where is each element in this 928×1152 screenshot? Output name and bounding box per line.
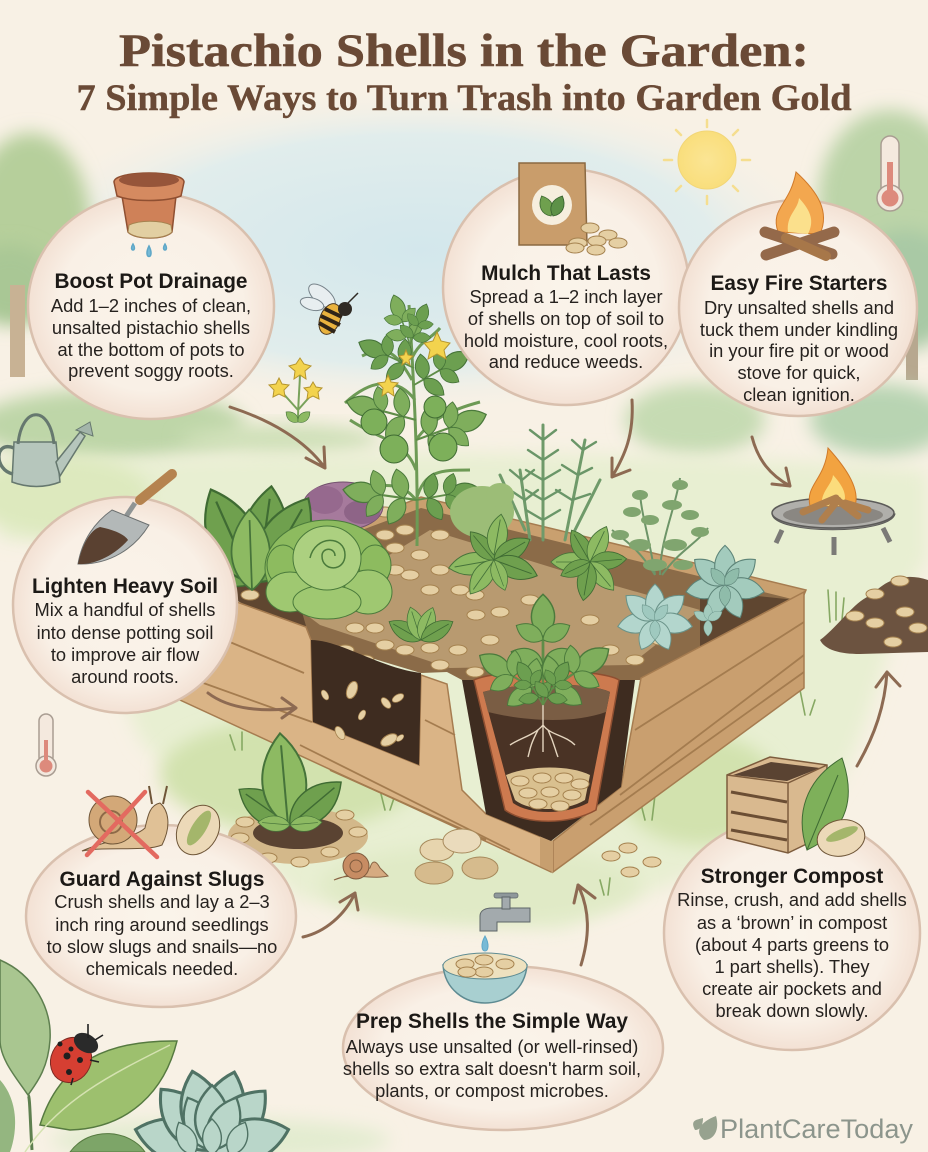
bubble: boost pot drainage: Boost Pot Drainage bbox=[55, 270, 247, 293]
bubble: mulch that lasts: Mulch That Lasts bbox=[481, 262, 651, 285]
plant: purple lettuce bbox=[303, 482, 383, 530]
bubble: boost pot drainage: unsalted pistachio shells bbox=[52, 317, 250, 338]
bubble: easy fire starters: Dry unsalted shells and bbox=[704, 297, 894, 318]
plant: carrot top in pot bbox=[463, 594, 628, 722]
arrow: to bed from drainage bbox=[230, 407, 325, 468]
panel: pot cutaway with soil bbox=[462, 671, 635, 841]
plant: spinach bbox=[184, 480, 328, 597]
icon: thermometer top right bbox=[877, 136, 903, 211]
bed back rim bbox=[232, 497, 806, 604]
icon: pistachio bbox=[168, 797, 228, 863]
bubble: lighten heavy soil: to improve air flow bbox=[51, 644, 200, 665]
plant: small herb behind basil bbox=[450, 483, 514, 538]
bubble: easy fire starters: clean ignition. bbox=[743, 384, 855, 405]
bubble: prep shells the simple way bbox=[343, 966, 663, 1130]
bubble: mulch that lasts: hold moisture, cool roots, bbox=[464, 330, 668, 351]
bubble: prep shells the simple way: plants, or compost microbes. bbox=[375, 1080, 609, 1101]
arrow: to compost heap bbox=[857, 672, 900, 766]
panel: raised bed back and soil bbox=[232, 497, 806, 680]
bubble: lighten heavy soil bbox=[13, 497, 237, 713]
bubble: guard against slugs: Guard Against Slugs bbox=[60, 868, 264, 891]
bubble: lighten heavy soil: around roots. bbox=[71, 666, 179, 687]
plant: rosemary bbox=[500, 425, 600, 540]
arrow: to bed from prep bbox=[574, 885, 595, 965]
arrow: to fire pit bbox=[752, 437, 790, 486]
bubble: boost pot drainage bbox=[28, 193, 274, 419]
arrow: to bed from mulch bbox=[612, 400, 632, 477]
icon: sun bbox=[664, 120, 750, 204]
title: Pistachio Shells in the Garden: bbox=[119, 25, 809, 77]
plant: basil right bbox=[551, 523, 627, 602]
bubble: stronger compost: Stronger Compost bbox=[701, 865, 883, 888]
bubble: guard against slugs: inch ring around seedlings bbox=[55, 914, 269, 935]
icon: fire pit bbox=[772, 448, 895, 555]
plant: thyme bbox=[611, 478, 709, 575]
plant: bottom succulent bbox=[130, 1066, 294, 1152]
title: 7 Simple Ways to Turn Trash into Garden Gold bbox=[76, 78, 852, 119]
bubble: stronger compost: 1 part shells). They bbox=[714, 956, 870, 977]
plant: seedling in ground bbox=[228, 731, 368, 867]
bubble: easy fire starters bbox=[679, 200, 917, 416]
bubble: boost pot drainage: prevent soggy roots. bbox=[68, 360, 234, 381]
bubble: guard against slugs: chemicals needed. bbox=[86, 958, 238, 979]
icon: logs and flame bbox=[765, 172, 834, 256]
bubble: mulch that lasts bbox=[443, 169, 689, 405]
title bbox=[76, 25, 852, 119]
shells: loose pile bbox=[415, 829, 498, 884]
soil surface bbox=[233, 508, 796, 680]
plant: tomato bbox=[339, 288, 497, 546]
bubble: boost pot drainage: Add 1–2 inches of clean, bbox=[51, 295, 251, 316]
shells: mulch on soil bbox=[241, 507, 669, 677]
panel: soil cutaway bbox=[311, 640, 421, 765]
icon: compost heap bbox=[820, 576, 928, 654]
plant: succulent back bbox=[684, 545, 766, 622]
plant: basil left bbox=[447, 513, 541, 600]
bubble: stronger compost: Rinse, crush, and add shells bbox=[677, 889, 907, 910]
bubble: stronger compost: (about 4 parts greens to bbox=[695, 934, 889, 955]
shells at pot base bbox=[506, 768, 590, 811]
bubble: stronger compost: create air pockets and bbox=[702, 978, 882, 999]
arrows bbox=[208, 400, 900, 965]
bubble: prep shells the simple way: Prep Shells the Simple Way bbox=[356, 1010, 628, 1033]
bubble: stronger compost: break down slowly. bbox=[715, 1000, 869, 1021]
bubble: prep shells the simple way: Always use unsalted (or well-rinsed) bbox=[346, 1036, 638, 1057]
icon: yellow flowers bbox=[269, 358, 322, 425]
left wall bbox=[180, 602, 551, 872]
bubble: stronger compost bbox=[664, 816, 920, 1050]
panel: raised bed wood walls bbox=[180, 592, 804, 872]
icon: bee bbox=[299, 280, 358, 338]
plant: bottom-left big leaves bbox=[0, 960, 177, 1152]
bubble: easy fire starters: Easy Fire Starters bbox=[711, 272, 887, 295]
bubble: easy fire starters: stove for quick, bbox=[738, 362, 860, 383]
bubble: guard against slugs bbox=[26, 825, 296, 1007]
icon: tap and bowl of shells bbox=[443, 893, 530, 1003]
arrow: to soil cutaway bbox=[208, 693, 296, 718]
bubble: lighten heavy soil: Mix a handful of shells bbox=[35, 599, 215, 620]
bubble: stronger compost: as a ‘brown’ in compost bbox=[697, 912, 887, 933]
plant: seedling in mulch bbox=[385, 605, 457, 648]
icon: watering can bbox=[0, 415, 93, 486]
bubble: mulch that lasts: and reduce weeds. bbox=[489, 351, 643, 372]
icon: compost crate, leaf and pistachio bbox=[727, 757, 868, 861]
icon: thermometer left bbox=[36, 714, 56, 776]
bubble: prep shells the simple way: shells so extra salt doesn't harm soil, bbox=[343, 1058, 641, 1079]
logo: PlantCareToday: PlantCareToday bbox=[720, 1114, 913, 1144]
bubble: easy fire starters: in your fire pit or wood bbox=[709, 340, 889, 361]
corner post bbox=[540, 836, 553, 872]
icon: ladybug bbox=[43, 1024, 103, 1089]
icon: snail near seedling bbox=[334, 853, 388, 880]
icon: trowel with soil bbox=[78, 474, 172, 564]
bubble: guard against slugs: to slow slugs and snails—no bbox=[47, 936, 277, 957]
plant: lettuce bbox=[265, 520, 392, 619]
bubble: lighten heavy soil: into dense potting soil bbox=[37, 622, 213, 643]
icon: crossed out snail bbox=[82, 786, 168, 857]
right wall bbox=[553, 592, 804, 872]
icon: terracotta pot with shells bbox=[114, 173, 184, 256]
bubble: mulch that lasts: Spread a 1–2 inch layer bbox=[469, 286, 663, 307]
bubble: boost pot drainage: at the bottom of pots to bbox=[58, 339, 244, 360]
bubble: guard against slugs: Crush shells and lay a 2–3 bbox=[54, 891, 270, 912]
bubble: lighten heavy soil: Lighten Heavy Soil bbox=[32, 575, 218, 598]
plant: succulent front bbox=[616, 584, 724, 653]
bubble: mulch that lasts: of shells on top of soil to bbox=[468, 308, 664, 329]
shells: scattered right bbox=[602, 843, 661, 877]
icon: mulch bag and shells bbox=[519, 163, 627, 255]
arrow: to slug seedling bbox=[303, 893, 358, 937]
bubble: easy fire starters: tuck them under kindling bbox=[700, 319, 898, 340]
